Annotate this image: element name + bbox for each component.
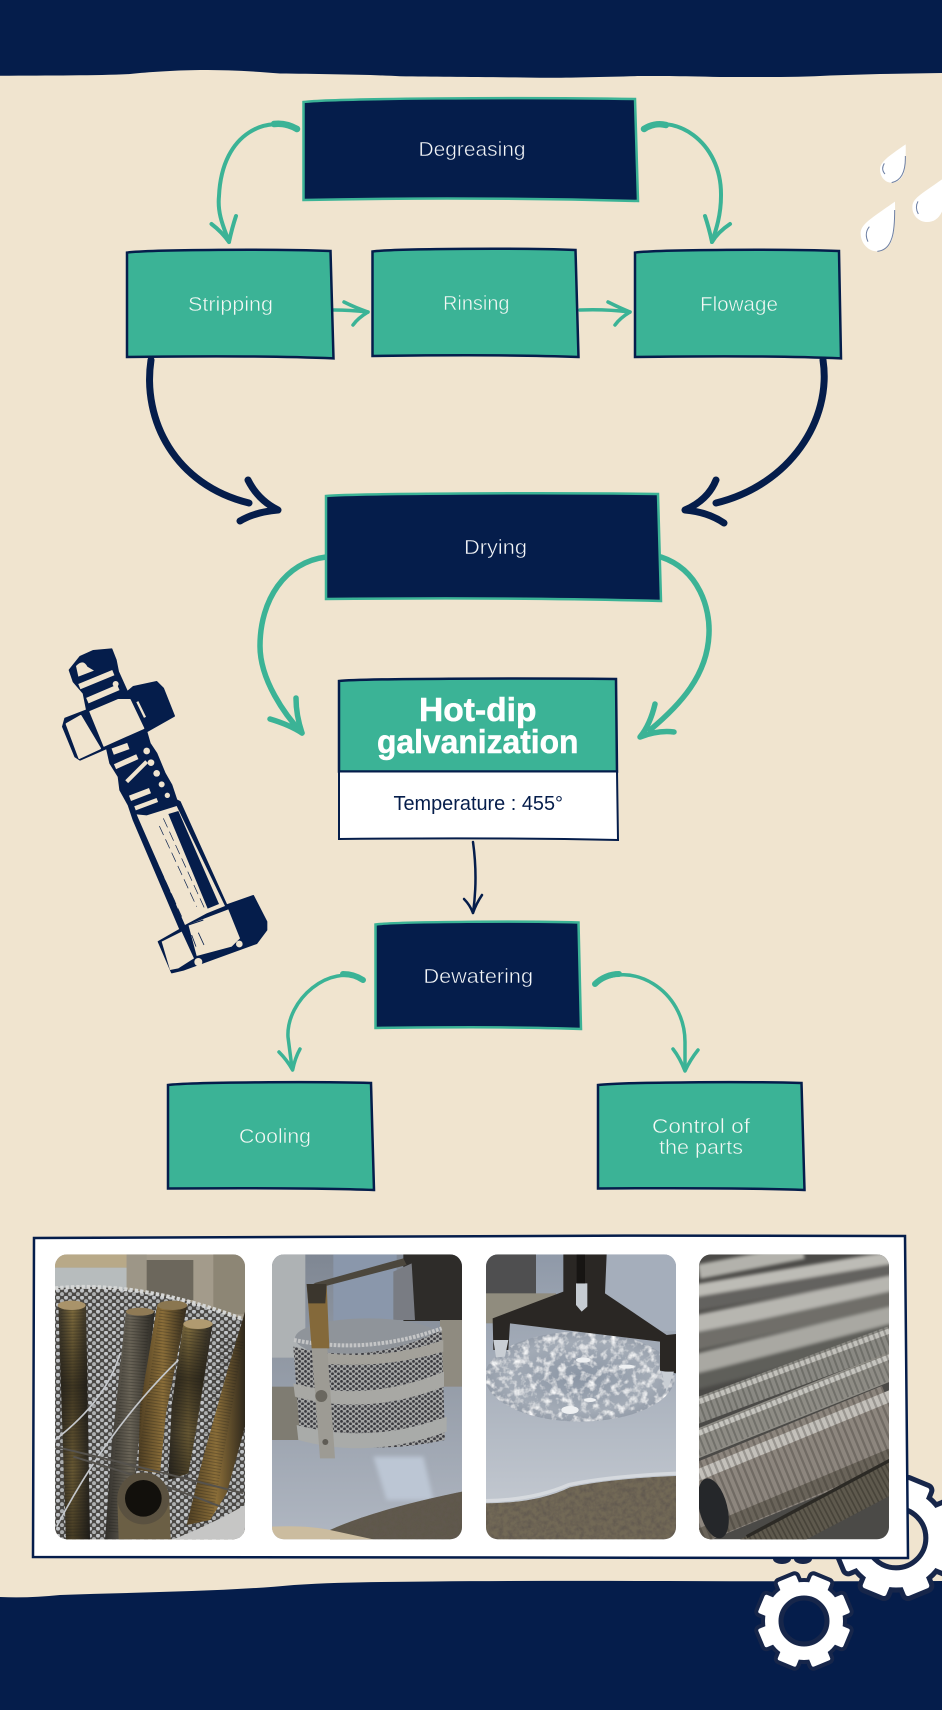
box: stripping: Stripping xyxy=(188,294,273,316)
box: degreasing xyxy=(304,98,638,201)
box: rinsing xyxy=(372,249,578,357)
photo: basket on zinc floor xyxy=(272,1254,462,1539)
box: dewatering: Dewatering xyxy=(424,966,533,988)
arrow: galvanization to dewatering xyxy=(464,842,482,913)
icon: bolt and nut xyxy=(63,649,267,973)
box: control of the parts: the parts xyxy=(659,1137,743,1159)
box: dewatering xyxy=(376,922,581,1029)
box: stripping xyxy=(127,250,334,358)
bottom navy band xyxy=(0,1581,942,1710)
arrow: drying to galvanization, right xyxy=(640,557,709,737)
arrow: rinsing to flowage xyxy=(580,302,630,325)
photo: threaded steel rods xyxy=(699,1254,889,1540)
box: flowage: Flowage xyxy=(700,294,778,316)
panel: process photos xyxy=(33,1236,908,1558)
box: cooling xyxy=(168,1082,374,1190)
photo: threaded rods in perforated basket xyxy=(55,1254,245,1539)
temperature note xyxy=(339,772,618,840)
header: hot-dip galvanization: Hot-dip xyxy=(419,691,536,728)
box: rinsing: Rinsing xyxy=(443,293,510,315)
icon: small gear xyxy=(758,1575,850,1667)
arrow: stripping to drying xyxy=(150,360,278,521)
box: control of the parts: Control of xyxy=(652,1116,750,1138)
icon: large gear xyxy=(837,1479,942,1597)
temperature note: Temperature : 455° xyxy=(394,793,563,815)
icon: water drops xyxy=(861,144,942,251)
header: hot-dip galvanization xyxy=(339,679,617,772)
box: degreasing: Degreasing xyxy=(418,139,526,161)
top navy band xyxy=(0,0,942,78)
arrow: flowage to drying xyxy=(685,360,824,523)
box: drying: Drying xyxy=(464,537,527,559)
arrow: stripping to rinsing xyxy=(334,302,368,325)
box: hot-dip galvanization xyxy=(339,679,618,840)
box: control of the parts xyxy=(598,1082,804,1190)
box: flowage xyxy=(635,250,841,358)
icon: hidden third gear teeth xyxy=(773,1554,812,1564)
arrow: degreasing to flowage xyxy=(644,124,730,242)
arrow: degreasing to stripping xyxy=(212,124,297,242)
arrow: drying to galvanization, left xyxy=(260,557,326,733)
arrow: dewatering to control of the parts xyxy=(595,974,698,1071)
box: drying xyxy=(326,493,661,601)
photo: lifting yoke in molten zinc xyxy=(485,1254,676,1539)
arrow: dewatering to cooling xyxy=(279,974,363,1070)
header: hot-dip galvanization: galvanization xyxy=(377,723,578,760)
box: cooling: Cooling xyxy=(239,1126,311,1148)
